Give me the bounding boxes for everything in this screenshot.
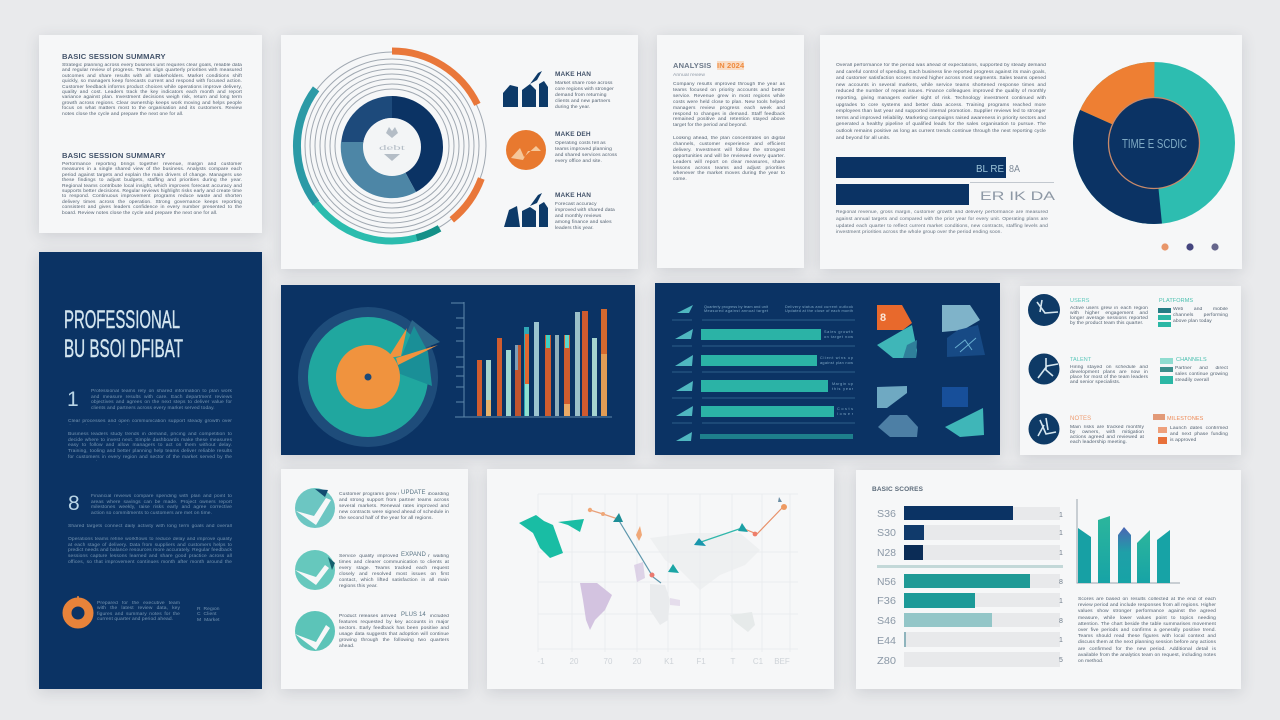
arc: teal bottom: [316, 203, 440, 241]
bar: first result: BL RE: [976, 164, 1004, 175]
row labels: S36: [877, 509, 896, 520]
text block: first summary: Strategic planning across every business unit requires clear goals, reliable data and regular review of progress. Teams align quarterly priorities with measured outcomes and share results with all stakeholders. Market conditions shift quickly, so managers keep forecasts current and respond with focused action. Customer feedback informs product choices while operations improve delivery, quality and cost. Leaders track the key indicators each month and report variance against plan. Investment decisions weigh risk, return and long term growth across regions. Clear ownership keeps work moving and helps people focus on what matters most to the organisation and its customers. Review notes close the cycle and prepare the next one for all.: [62, 63, 242, 117]
axis labels: 20: [570, 657, 579, 666]
donut: navy segment: [392, 96, 443, 192]
row values: 8: [1059, 618, 1063, 625]
text block: item 8 lead: Financial reviews compare spending with plan and point to areas where savings can be made. Project owners report milestones weekly, raise risks early and agree corrective action so commitments to customers are met on time.: [91, 494, 232, 516]
text block: row three: Main risks are tracked monthly by owners, with mitigation actions agreed and reviewed at each leadership meeting.: [1070, 425, 1144, 445]
row labels: S30: [877, 528, 896, 539]
heading: item three: MAKE HAN: [555, 192, 591, 199]
icon: chart peaks top: [503, 71, 548, 107]
labels: row captions: [704, 305, 854, 416]
shape: blue tile: [947, 325, 985, 357]
row labels: F36: [877, 596, 896, 607]
caption: Annual review: [673, 73, 705, 78]
row values: 1: [1059, 598, 1063, 605]
labels: row captions: against plan now: [820, 361, 853, 365]
labels: row captions: Delivery status and current outlook: [785, 305, 853, 309]
heading: BASIC SCORES: [872, 486, 923, 493]
text block: item one: Market share rose across core regions with stronger demand from returning clients and new partners during the year.: [555, 81, 614, 110]
title: BU BSOI DFIBAT: [64, 335, 183, 363]
heading: row three right: MILESTONES: [1167, 416, 1203, 422]
icons: row wedges: [675, 305, 693, 441]
legend dots: [1161, 243, 1219, 251]
chart: rings and donut: [292, 48, 548, 244]
heading: row one right: PLATFORMS: [1159, 298, 1193, 304]
spike: orange pointers: [388, 328, 438, 365]
icon: centre emblem: [379, 127, 405, 161]
chart: horizontal bars: [877, 499, 1180, 667]
heading: orange label: IN 2024: [717, 61, 744, 70]
donut: steel blue segment: [341, 142, 416, 198]
panel: teal icon list: [281, 469, 468, 689]
arc: teal left: [297, 89, 316, 203]
panel: concentric ring chart: [281, 35, 638, 269]
donut: centre label: TIME E SCDIC: [1122, 136, 1187, 151]
trend line: [590, 507, 783, 583]
shape: oval tile: [878, 415, 918, 437]
row labels: N28: [877, 548, 896, 559]
donut: teal segment: [1073, 62, 1235, 224]
row labels: E44: [877, 636, 896, 647]
axis labels: -1: [537, 657, 545, 666]
arc: dark teal accent: [417, 228, 440, 238]
text block: row three right: Launch dates confirmed and next phase funding is approved: [1170, 426, 1228, 443]
row values: [1059, 512, 1063, 664]
keys: orange chips: [1153, 414, 1167, 444]
panel: world map line chart: [487, 469, 834, 689]
heading: entry one: UPDATE: [401, 490, 426, 496]
row values: 1: [1059, 550, 1063, 557]
donut: centre label: [1108, 98, 1200, 188]
arc: orange top: [392, 51, 477, 104]
panel: icon list: [1020, 286, 1241, 455]
donut: orange segment: [1080, 62, 1154, 124]
text block: bar notes: Regional revenue, gross margin, customer growth and delivery performance are measured against annual targets and compared with the prior year for every unit. Operating plans are updated each quarter to reflect current market conditions, new contracts, staffing levels and investment priorities across the whole group over the period ending soon.: [836, 210, 1048, 235]
labels: row captions: Client wins up: [820, 356, 853, 360]
chart: map with trend line: [519, 494, 798, 666]
axis labels: 20: [633, 657, 642, 666]
heading: item one: MAKE HAN: [555, 71, 591, 78]
text block: chart notes: Scores are based on results collected at the end of each review period and include responses from all regions. Higher values show stronger performance against the agreed measure, while lower values point to topics needing attention. The chart beside the table summarises movement over five periods and confirms a generally positive trend. Teams should read these figures with local context and discuss them at the next planning session before any actions are confirmed for the new period. Additional detail is available from the analytics team on request, including notes on method.: [1078, 597, 1216, 664]
axis labels: C1: [753, 657, 764, 666]
bar: second result: [836, 182, 1055, 205]
text block: row two right: Partner and direct sales continue growing steadily overall: [1175, 366, 1228, 383]
number 1: 1: [67, 388, 79, 411]
shape: small pale tile: [877, 386, 907, 408]
map: teal landmasses: [519, 515, 584, 558]
heading: entry two: EXPAND: [401, 552, 426, 558]
row values: 1: [1059, 637, 1063, 644]
text block: item three: Forecast accuracy improved with shared data and monthly reviews among finance and sales leaders this year.: [555, 202, 615, 231]
title: [64, 306, 183, 363]
heading: second summary: BASIC SESSION SUMMARY: [62, 151, 166, 160]
labels: row captions: on target now: [824, 335, 853, 339]
labels: row captions: Costs: [837, 407, 853, 411]
heading: item two: MAKE DEH: [555, 131, 591, 138]
shape: teal tile: [877, 325, 917, 358]
axis labels: F1: [696, 657, 706, 666]
text block: paragraph two: Looking ahead, the plan concentrates on digital channels, customer experience and efficient delivery. Investment will follow the strongest opportunities and will be reviewed every quarter. Leaders will report on clear measures, share lessons across teams and adjust priorities whenever the market moves during the year to come.: [673, 136, 785, 182]
labels: row captions: Updated at the close of each month: [785, 309, 853, 313]
row labels: [877, 509, 896, 667]
text block: item two: Operating costs fell as teams improved planning and shared services across every office and site.: [555, 141, 617, 164]
panel: radial and column charts: [281, 285, 635, 455]
bars: teal progress: [700, 329, 853, 439]
donut: navy segment: [1073, 110, 1162, 224]
heading: row three: NOTES: [1070, 416, 1091, 422]
shape: orange tile: [877, 305, 912, 330]
row labels: Z80: [877, 656, 896, 667]
text block: row one right: Web and mobile channels performing above plan today: [1173, 307, 1228, 324]
heading: entry three: PLUS 14: [401, 612, 426, 618]
bar: first result: [836, 62, 1235, 251]
map: lavender landmasses: [580, 562, 680, 630]
row values: 8: [1059, 579, 1063, 586]
chart: columns: [451, 302, 612, 417]
axis labels: BEF: [774, 657, 790, 666]
text block: entry two: Service quality improved with shorter waiting times and clearer communication to clients at every stage. Teams tracked each request closely and resolved most issues on first contact, which lifted satisfaction in all main regions this year.: [339, 554, 449, 589]
legend: footer keys: R Region C Client M Market: [197, 607, 220, 623]
row values: 5: [1059, 657, 1063, 664]
map: grey landmasses: [650, 533, 760, 632]
labels: row captions: this year: [832, 387, 854, 391]
bar: second result: ER IK DA: [980, 189, 1055, 203]
icons: teal badges: [295, 488, 335, 651]
number 8: 8: [68, 492, 80, 515]
icons: navy circles: [1028, 294, 1173, 444]
icon: centre emblem: debt: [379, 144, 405, 152]
row values: 1: [1059, 512, 1063, 519]
chart: progress rows: [672, 305, 985, 441]
text block: row one: Active users grew in each region with higher engagement and longer average sessions reported by the product team this quarter.: [1070, 306, 1148, 326]
text block: entry three: Product releases arrived on time and included features requested by key accounts in major sectors. Early feedback has been positive and usage data suggests that adoption will continue growing through the following two quarters ahead.: [339, 614, 449, 649]
panel: cover title and contents: [39, 252, 262, 689]
panel: progress bars and shapes: [655, 283, 1000, 455]
row labels: N56: [877, 577, 896, 588]
text block: footer note: Prepared for the executive team with the latest review data, key figures and summary notes for the current quarter and period ahead.: [97, 601, 180, 622]
heading: first summary: BASIC SESSION SUMMARY: [62, 52, 166, 61]
icon: chart peaks bottom: [504, 193, 548, 227]
shape: orange tile: 8: [880, 312, 886, 324]
labels: row captions: lower: [837, 412, 854, 416]
panel: narrative text: [657, 35, 804, 268]
heading: row two: TALENT: [1070, 357, 1091, 363]
text block: paragraph one: Company results improved through the year as teams focused on priority accounts and better service. Revenue grew in most regions while costs were held close to plan. New tools helped managers review progress each week and respond to changes in demand. Staff feedback remained positive and retention stayed above target for the period and beyond.: [673, 82, 785, 128]
labels: row captions: Margin up: [832, 382, 853, 386]
keys: teal chips: [1158, 308, 1173, 384]
text block: item 1 lead: Professional teams rely on shared information to plan work and measure results with care. Each department reviews objectives and agrees on the next steps to deliver value for clients and partners across every market served today.: [91, 389, 232, 410]
shape: teal curve: [945, 408, 984, 437]
axis labels: K1: [664, 657, 674, 666]
labels: row captions: Measured against annual target: [704, 309, 769, 313]
row labels: S46: [877, 616, 896, 627]
chart: radial target: [298, 302, 612, 447]
panel: results and donut: [820, 35, 1242, 269]
shape: blue square: [942, 387, 968, 407]
axis labels: 70: [604, 657, 613, 666]
text block: row two: Hiring stayed on schedule and development plans are now in place for most of the team leaders and senior specialists.: [1070, 365, 1148, 385]
panel: summary text: [39, 35, 262, 233]
arc: orange lower: [452, 178, 481, 220]
wedge: blue sector: [395, 320, 440, 360]
chart: columns: [1077, 499, 1180, 583]
row values: 1: [1059, 530, 1063, 537]
title: PROFESSIONAL: [64, 306, 180, 334]
icon: orange circle: [506, 130, 546, 170]
labels: row captions: Sales growth: [824, 330, 853, 334]
icon: orange ring: [62, 596, 94, 628]
panel: horizontal bars and column chart: [856, 470, 1241, 689]
bar: first result: 8A: [1009, 164, 1020, 175]
heading: grey label: ANALYSIS: [673, 61, 711, 70]
markers: teal and orange points: [588, 497, 787, 578]
shape: pale blue tile: [942, 305, 980, 332]
donut: mid navy segment: [341, 96, 392, 146]
axis labels: [537, 657, 790, 666]
text block: second summary: Performance reporting brings together revenue, margin and customer measures in a single shared view of the business. Analysts compare each period against targets and explain the main drivers of change. Managers use these findings to adjust budgets, staffing and priorities during the year. Regional teams contribute local insight, which improves forecast accuracy and supports better decisions. Regular reviews highlight risks early and create time to respond. Continuous improvement programs reduce waste and shorten delivery times across the operation. Strong governance keeps reporting consistent and gives leaders confidence in every number presented to the board. Review notes close the cycle and prepare the next one for all.: [62, 162, 242, 216]
heading: row two right: CHANNELS: [1176, 357, 1207, 363]
axis labels: T: [731, 657, 736, 666]
text block: entry one: Customer programs grew with better onboarding and strong support from partner teams across several markets. Renewal rates improved and new contracts were signed ahead of schedule in the second half of the year for all regions.: [339, 492, 449, 521]
text block: overview: Overall performance for the period was ahead of expectations, supported by steady demand and careful control of spending. Each business line reported progress against its main goals, and customer satisfaction scores moved higher across most segments. Sales teams opened new accounts in several markets, while service teams shortened response times and reduced the number of repeat issues. Finance colleagues improved the quality of monthly reporting, giving managers earlier sight of risk. Technology investment continued with upgrades to core systems and better data access. Training programs reached more employees than last year and supported internal promotion. Supplier reviews led to stronger terms and improved reliability. Marketing campaigns raised awareness in priority sectors and generated a healthy pipeline of qualified leads for the sales organisation to pursue. The outlook remains positive as long as current trends continue through the next reporting cycle and beyond for all units.: [836, 63, 1046, 141]
labels: row captions: Quarterly progress by team and unit: [704, 305, 769, 309]
heading: row one: USERS: [1070, 298, 1090, 304]
